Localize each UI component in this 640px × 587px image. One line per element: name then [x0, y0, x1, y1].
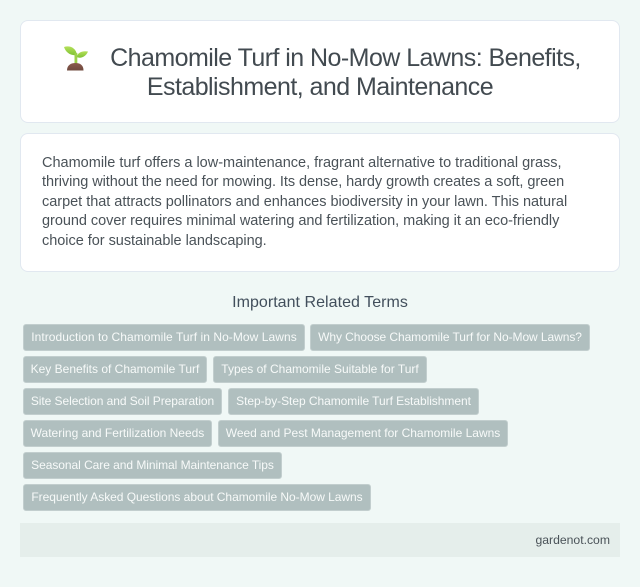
chip [23, 356, 207, 383]
description text: carpet that attracts pollinators and enhances biodiversity in your lawn. This natural [42, 194, 567, 210]
source label: gardenot.com [535, 533, 610, 547]
chip [23, 324, 305, 351]
footer [20, 523, 620, 557]
chip [23, 484, 371, 511]
description text: ground cover requires minimal watering and fertilization, making it an eco-friendly [42, 213, 559, 229]
panel: description [20, 133, 620, 272]
chip [310, 324, 590, 351]
chip [23, 452, 282, 479]
title: Establishment, and Maintenance [147, 73, 493, 101]
description text: thriving without the need for mowing. Its dense, hardy growth creates a soft, green [42, 174, 564, 190]
description text: choice for sustainable landscaping. [42, 232, 267, 248]
chip [23, 388, 222, 415]
chip: Watering and Fertilization Needs [31, 426, 204, 440]
chip: Weed and Pest Management for Chamomile Lawns [226, 426, 500, 440]
chip list [23, 324, 590, 511]
chip [228, 388, 479, 415]
chip: Key Benefits of Chamomile Turf [31, 362, 199, 376]
chip: Frequently Asked Questions about Chamomile No-Mow Lawns [31, 490, 363, 504]
chip: Introduction to Chamomile Turf in No-Mow Lawns [31, 330, 297, 344]
chip [23, 420, 212, 447]
title: Chamomile Turf in No-Mow Lawns: Benefits, [110, 44, 581, 72]
icon: seedling [64, 46, 88, 70]
chip: Step-by-Step Chamomile Turf Establishment [236, 394, 471, 408]
chip: Why Choose Chamomile Turf for No-Mow Lawns? [318, 330, 582, 344]
description text [42, 154, 567, 248]
chip: Site Selection and Soil Preparation [31, 394, 214, 408]
chip: Types of Chamomile Suitable for Turf [221, 362, 419, 376]
heading: related terms: Important Related Terms [232, 294, 408, 311]
chip [218, 420, 508, 447]
title [110, 44, 581, 101]
panel: header [20, 20, 620, 123]
chip: Seasonal Care and Minimal Maintenance Tips [31, 458, 274, 472]
description text: Chamomile turf offers a low-maintenance, fragrant alternative to traditional grass, [42, 154, 562, 170]
chip [213, 356, 427, 383]
